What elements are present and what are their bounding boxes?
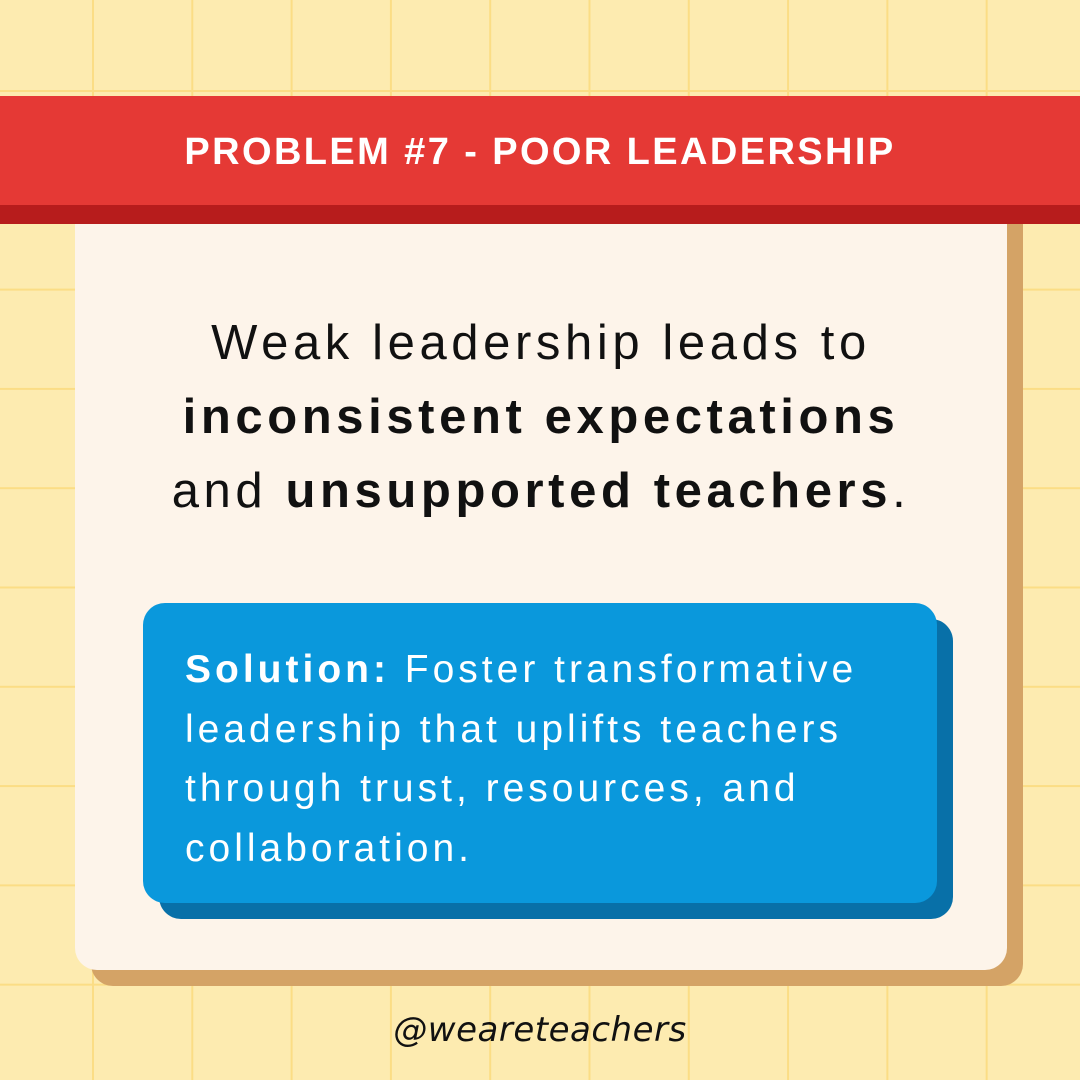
problem statement: inconsistent expectations: [183, 390, 899, 444]
header banner: [0, 96, 1080, 224]
main card: [75, 224, 1007, 970]
header title: [0, 96, 1080, 205]
solution text: through trust, resources, and: [185, 767, 800, 810]
solution text: leadership that uplifts teachers: [185, 708, 842, 750]
solution text: Solution: Foster transformative: [185, 648, 857, 691]
problem statement: [172, 316, 910, 518]
footer handle: @weareteachers: [393, 1010, 687, 1050]
problem statement: and unsupported teachers.: [172, 464, 910, 518]
problem statement: Weak leadership leads to: [211, 316, 871, 370]
header title: PROBLEM #7 - POOR LEADERSHIP: [184, 131, 896, 173]
solution text: collaboration.: [185, 826, 473, 870]
solution box: [143, 603, 937, 903]
solution text: [185, 648, 857, 870]
solution box shadow: [159, 619, 953, 919]
card shadow: [91, 224, 1023, 986]
